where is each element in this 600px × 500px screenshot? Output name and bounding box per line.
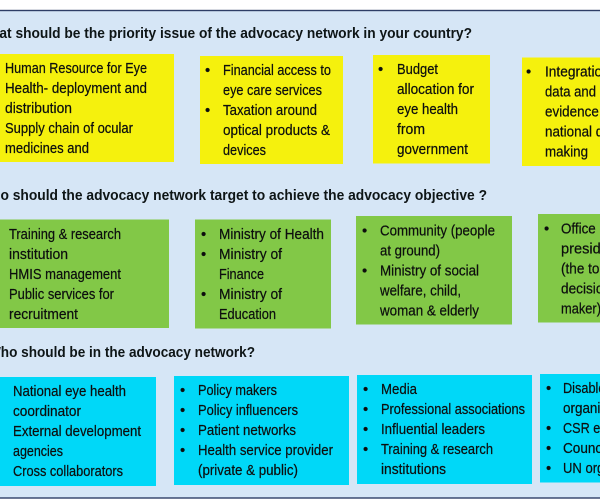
cyan box: media and associations: • [363,422,368,438]
cyan box: policy and providers: • [180,443,185,459]
cyan box: coordinators: agencies [13,444,63,460]
cyan box: media and associations: Professional associations [381,402,525,418]
yellow box: budget allocation: government [397,142,468,158]
yellow box: financial access: • [205,103,210,119]
cyan box: policy and providers: (private & public) [198,463,298,479]
green box: ministries: Ministry of [219,247,283,263]
yellow box: human resources: Health- deployment and [5,81,147,97]
cyan box: policy and providers: • [180,403,185,419]
green box: community and welfare [356,216,512,324]
green box: community and welfare: welfare, child, [379,284,461,300]
yellow box: financial access: Financial access to [223,63,331,79]
green box: training and services: recruitment [9,307,78,323]
green box: community and welfare: • [362,264,367,280]
green box: training and services: Training & research [9,227,121,243]
yellow box: human resources: medicines and [5,141,89,157]
cyan box: coordinators: Cross collaborators [13,464,123,480]
green box: ministries: Ministry of [219,287,283,303]
green box: training and services: institution [9,247,68,263]
green box: community and welfare: Ministry of social [380,264,479,280]
cyan box: coordinators: External development [13,424,141,440]
green box: ministries: • [201,247,206,263]
cyan box: disability and UN organisations: • [546,381,551,397]
cyan box: coordinators [0,377,156,486]
cyan box: media and associations: • [363,402,368,418]
yellow box: budget allocation: allocation for [397,82,474,98]
green box: ministries: Ministry of Health [219,227,324,243]
cyan box: disability and UN organisations: • [546,441,551,457]
yellow box: data integration: making [545,144,588,160]
green box: ministries [195,220,331,328]
yellow box: financial access: devices [223,143,266,159]
cyan box: media and associations: • [363,442,368,458]
cyan box: policy and providers [174,376,349,485]
yellow box: human resources: Supply chain of ocular [5,121,133,137]
cyan box: policy and providers: Policy makers [198,383,277,399]
cyan box: policy and providers: • [180,383,185,399]
yellow box: financial access: optical products & [223,123,330,139]
yellow box: human resources: Human Resource for Eye [5,61,147,77]
green box: ministries: Education [219,307,276,323]
yellow box: human resources: distribution [5,101,72,117]
green box: ministries: • [201,287,206,303]
yellow box: data integration: • [526,64,531,80]
yellow box: data integration [522,58,600,166]
cyan box: coordinators: coordinator [13,404,81,420]
cyan box: policy and providers: Health service provider [198,443,333,459]
cyan box: media and associations [357,375,532,484]
green box: community and welfare: at ground) [380,244,440,260]
yellow box: human resources [0,54,174,162]
cyan box: media and associations: Influential leaders [381,422,485,438]
yellow box: budget allocation: • [378,62,383,78]
yellow box: budget allocation: Budget [397,62,438,78]
yellow box: financial access [200,56,343,164]
green box: office of the president: • [544,222,549,238]
cyan box: disability and UN organisations [540,374,600,482]
yellow box: financial access: eye care services [223,83,322,99]
cyan box: coordinators: National eye health [13,384,126,400]
yellow box: budget allocation [373,55,490,164]
yellow box: financial access: • [205,63,210,79]
green box: ministries: Finance [219,267,264,283]
green box: training and services: HMIS management [9,267,121,283]
cyan box: media and associations: Training & research [381,442,493,458]
cyan box: media and associations: Media [381,382,418,398]
cyan box: disability and UN organisations: • [546,421,551,437]
cyan box: policy and providers: Policy influencers [198,403,298,419]
cyan box: policy and providers: • [180,423,185,439]
yellow box: budget allocation: eye health [397,102,458,118]
green box: community and welfare: woman & elderly [379,304,480,320]
green box: community and welfare: • [362,224,367,240]
green box: community and welfare: Community (people [380,224,495,240]
green box: training and services [0,220,169,328]
cyan box: disability and UN organisations: • [546,461,551,477]
cyan box: policy and providers: Patient networks [198,423,296,439]
yellow box: financial access: Taxation around [223,103,317,119]
green box: ministries: • [201,227,206,243]
yellow box: budget allocation: from [397,122,425,138]
cyan box: media and associations: • [363,382,368,398]
green box: training and services: Public services for [9,287,114,303]
green box: office of the president [538,214,600,322]
cyan box: media and associations: institutions [381,462,446,478]
